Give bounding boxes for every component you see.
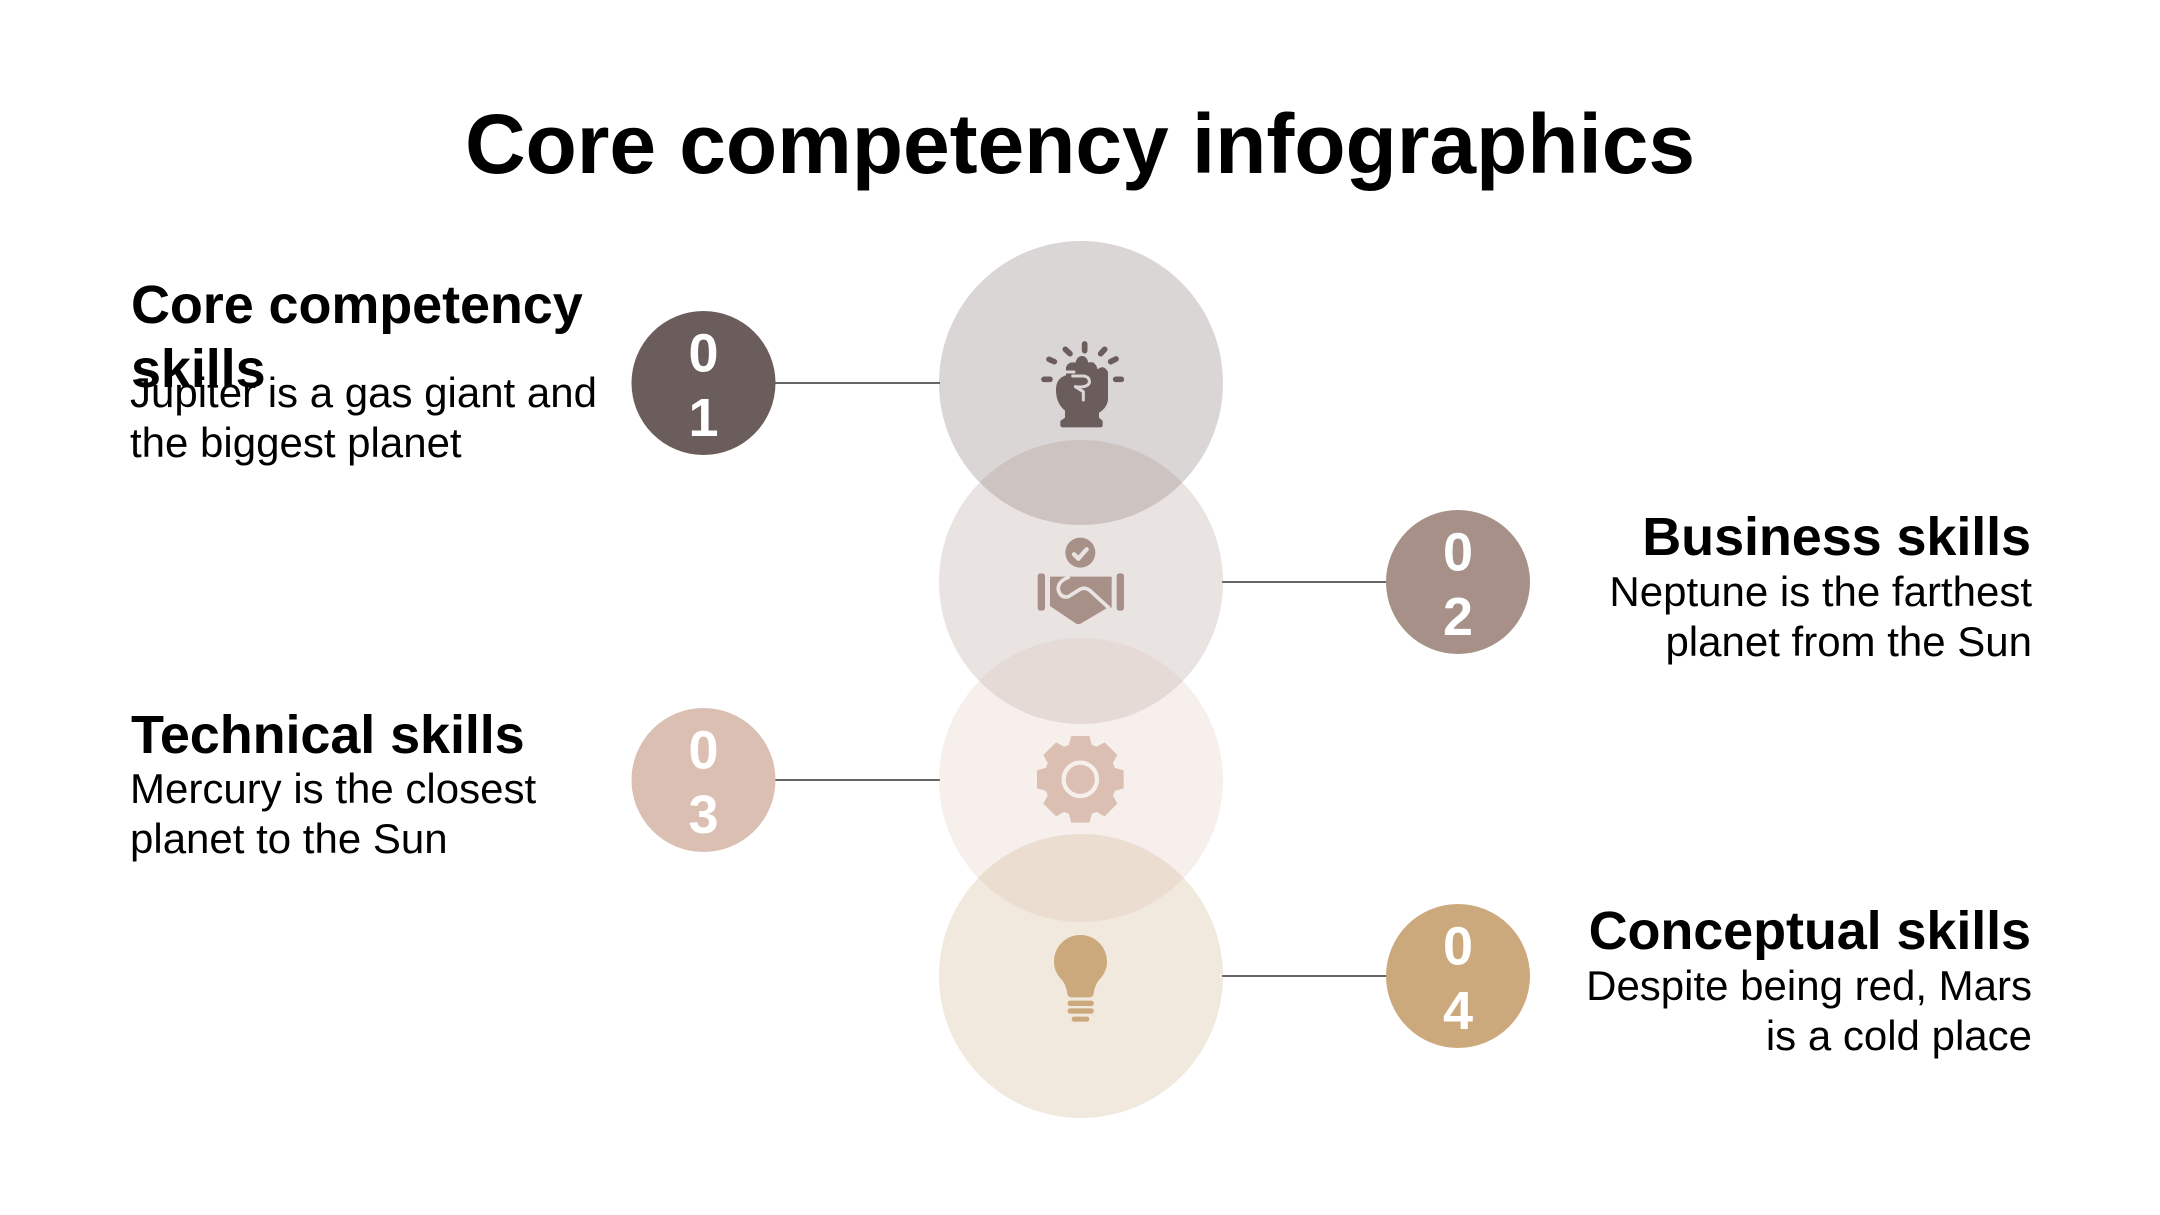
- description 02: Neptune is the farthest: [1609, 568, 2032, 615]
- description 03: planet to the Sun: [130, 815, 448, 862]
- number badge 04: 0: [1443, 916, 1473, 976]
- number badge 01: 0: [688, 324, 719, 384]
- number badge 03: [632, 708, 776, 852]
- description 02: planet from the Sun: [1665, 618, 2032, 665]
- heading 02: Business skills: [1642, 507, 2031, 567]
- large circle 02: [939, 440, 1223, 724]
- icon: raised fist: [1044, 344, 1121, 427]
- large circle 04: [939, 834, 1223, 1118]
- panel: core competency skills: [130, 241, 1223, 525]
- number badge 01: 1: [688, 388, 719, 448]
- number badge 03: 3: [688, 785, 719, 845]
- title: Core competency infographics: [465, 97, 1695, 191]
- icon: gear: [1037, 736, 1124, 823]
- large circle 01: [939, 241, 1223, 525]
- large circle 03: [939, 638, 1223, 922]
- connector line 03: [775, 779, 940, 781]
- number badge 02: 0: [1443, 522, 1473, 582]
- panel: technical skills: [130, 638, 1223, 922]
- heading 03: Technical skills: [131, 705, 525, 765]
- description 03: Mercury is the closest: [130, 765, 536, 812]
- connector line 01: [775, 382, 940, 384]
- description 04: Despite being red, Mars: [1586, 962, 2032, 1009]
- heading 01: Core competency: [131, 275, 583, 335]
- number badge 03: 0: [688, 720, 719, 780]
- description 01: the biggest planet: [130, 419, 462, 466]
- icon: handshake with check mark: [1038, 538, 1124, 624]
- connector line 02: [1222, 581, 1387, 583]
- description 04: is a cold place: [1766, 1012, 2032, 1059]
- number badge 04: [1386, 904, 1530, 1048]
- connector line 04: [1222, 975, 1387, 977]
- panel: conceptual skills: [939, 834, 2032, 1118]
- number badge 01: [632, 311, 776, 455]
- number badge 04: 4: [1443, 981, 1473, 1041]
- heading 04: Conceptual skills: [1589, 901, 2031, 961]
- panel: business skills: [939, 440, 2032, 724]
- icon: light bulb: [1054, 935, 1107, 1022]
- description 01: Jupiter is a gas giant and: [130, 369, 597, 416]
- heading 01: skills: [131, 339, 266, 399]
- number badge 02: [1386, 510, 1530, 654]
- number badge 02: 2: [1443, 587, 1473, 647]
